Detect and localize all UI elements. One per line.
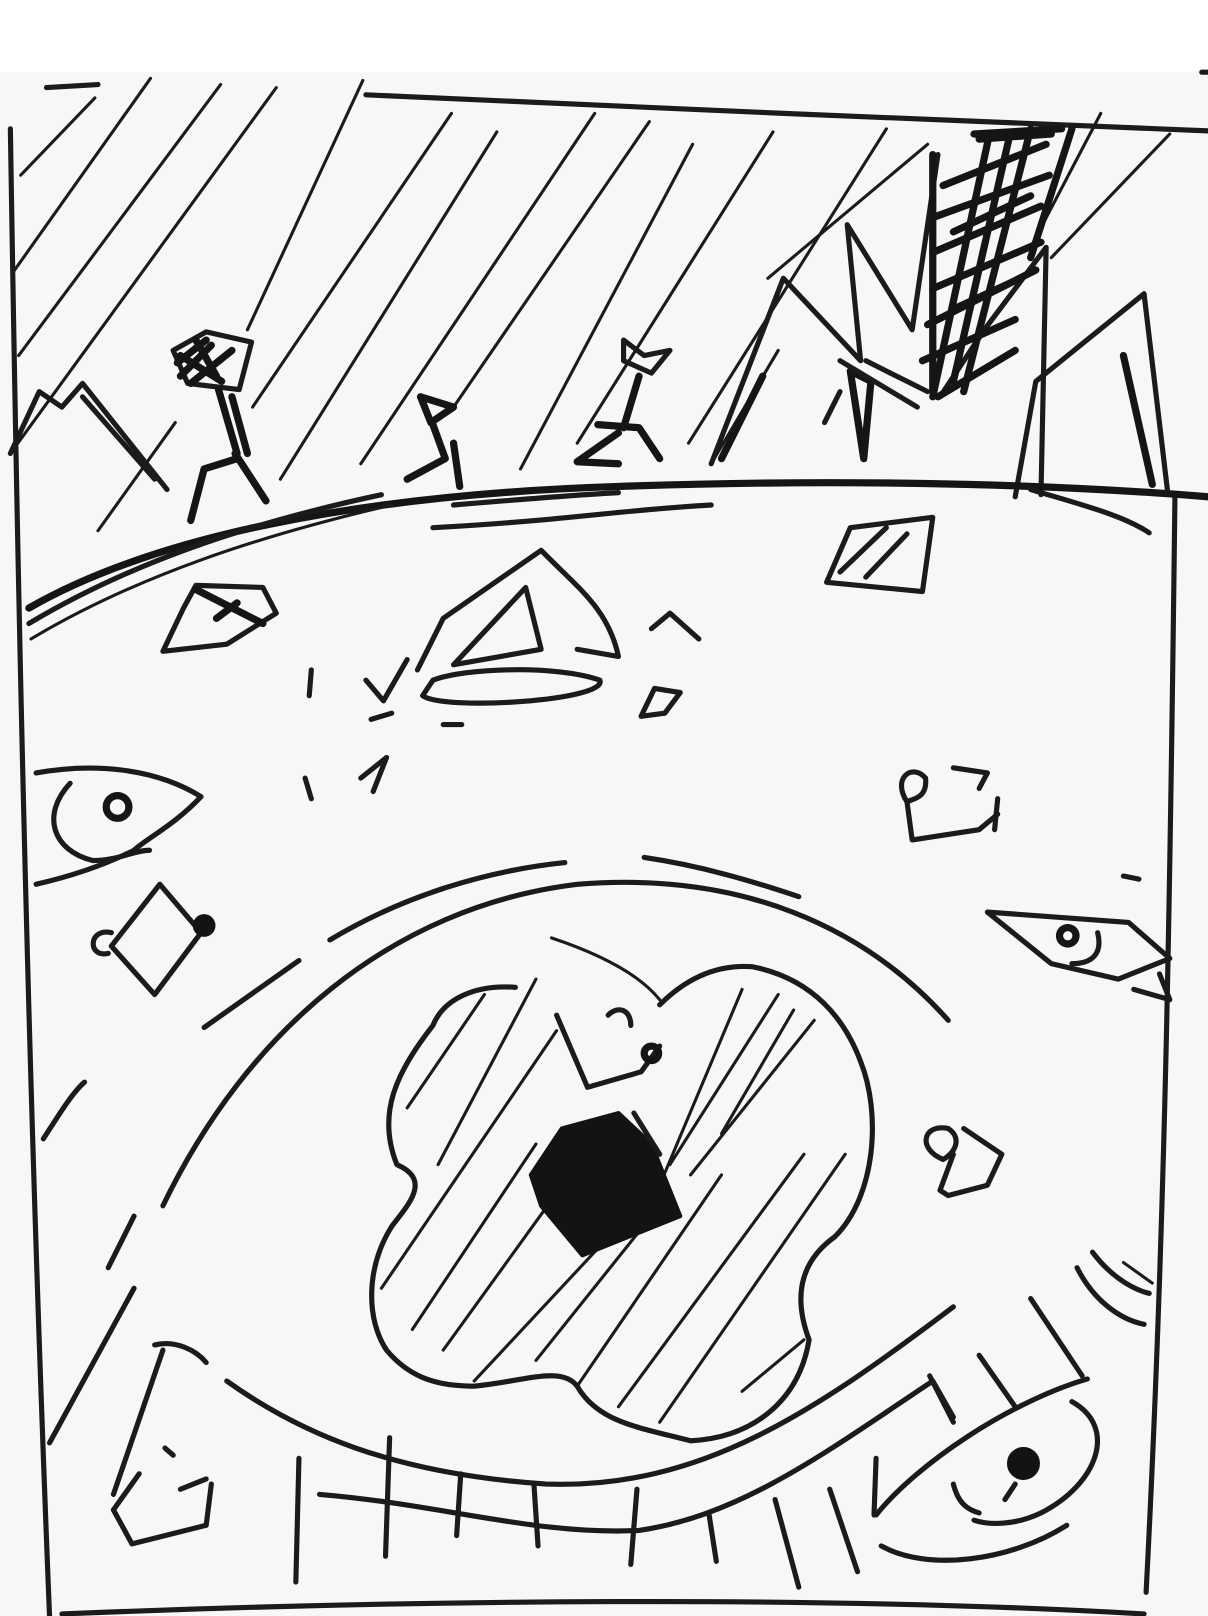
eye lower right bbox=[876, 1379, 1097, 1560]
small creature upper right bbox=[901, 768, 998, 840]
figure left with hatched head bbox=[173, 332, 266, 520]
small creature right bbox=[926, 1128, 1002, 1196]
eye right bbox=[987, 876, 1170, 1000]
large arc bbox=[43, 857, 948, 1206]
horizon ground lines bbox=[29, 483, 1208, 639]
creature lower left bbox=[113, 1448, 211, 1544]
rock left bbox=[163, 585, 276, 651]
lower tick marks bbox=[296, 1438, 876, 1587]
rock right bbox=[827, 517, 933, 592]
sky hatching bbox=[10, 78, 1170, 531]
eye left bbox=[36, 768, 201, 884]
figure on blob bbox=[557, 1010, 660, 1087]
dark scribble core bbox=[531, 1113, 680, 1255]
lower right arcs bbox=[930, 1252, 1152, 1422]
central blob with hatching bbox=[372, 938, 872, 1441]
central rock and puddle bbox=[305, 550, 699, 799]
small seated figure bbox=[407, 397, 460, 486]
lower arcs bbox=[50, 1216, 953, 1531]
jagged structure and tower bbox=[711, 129, 1168, 497]
small creature left bbox=[93, 884, 213, 995]
mountain left bbox=[10, 383, 167, 490]
figure with raised arms bbox=[577, 340, 670, 464]
